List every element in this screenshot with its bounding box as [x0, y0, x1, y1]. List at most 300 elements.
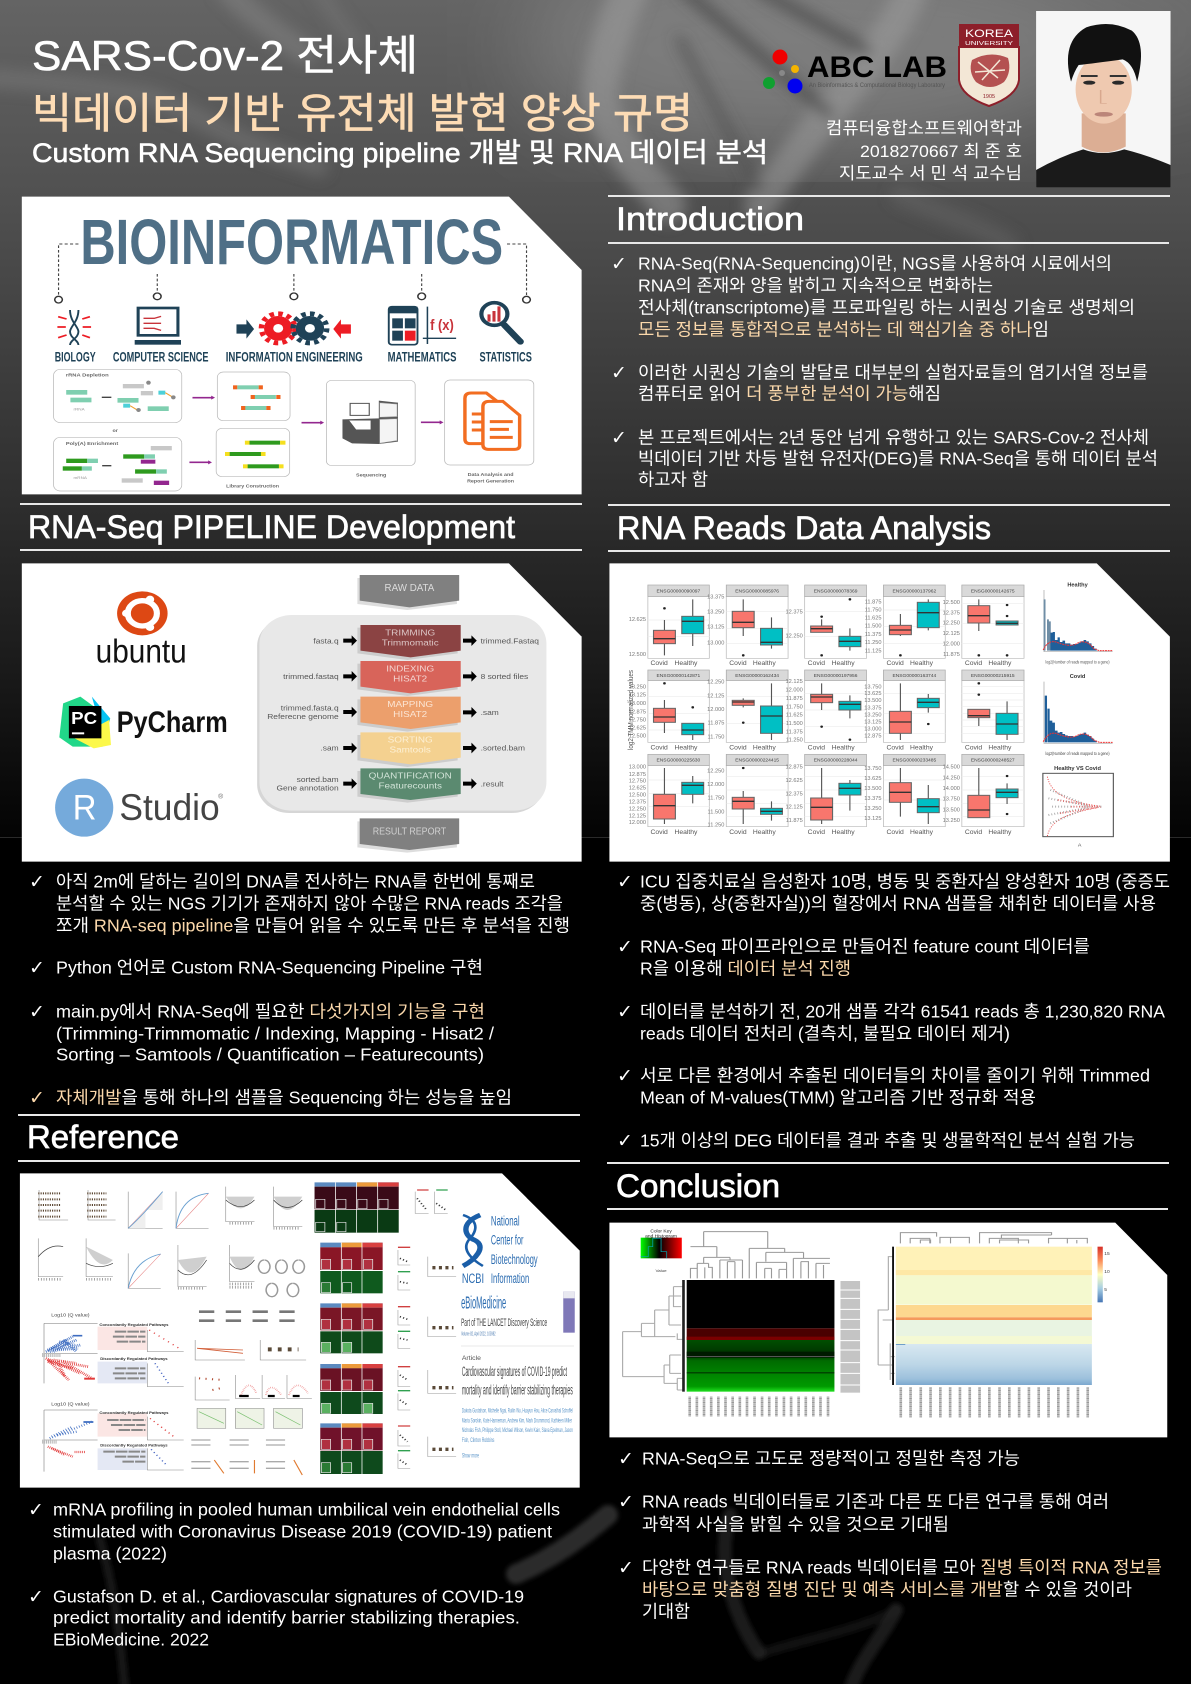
text block: data analysis bullets: 서로 다른 환경에서 추출된 데이터들의 차이를 줄이기 위해 Trimmed — [640, 1066, 1150, 1086]
chart: DEG boxplots: 11.625 — [786, 713, 803, 719]
heading: Introduction: Introduction — [616, 201, 804, 237]
figure: side quantification plots — [398, 1190, 456, 1468]
text block: introduction bullets: 모든 정보를 통합적으로 분석하는 데 핵심기술 중 하나 임 — [638, 320, 1049, 340]
chart: DEG boxplots: 13.000 — [864, 727, 882, 732]
chart: DEG boxplots: ENSG00000228044 — [814, 758, 858, 763]
author information: 지도교수 서 민 석 교수님 — [839, 164, 1022, 183]
chart: DEG boxplots: ENSG00000078369 — [814, 589, 858, 594]
chart: DEG boxplots: 12.000 — [786, 688, 803, 694]
text block: data analysis bullets: RNA-Seq 파이프라인으로 만들어진 feature count 데이터를 — [640, 936, 1090, 956]
text block: introduction bullets: ✓ — [611, 253, 627, 275]
photo: student portrait — [1036, 11, 1171, 188]
panel: RNA reads data analysis charts — [609, 563, 1170, 862]
chart: DEG boxplots: Healthy — [988, 660, 1012, 667]
chart: DEG boxplots: 13.000 — [707, 641, 724, 647]
chart: DEG boxplots: 13.250 — [864, 806, 882, 812]
chart: DEG boxplots: ENSG00000142675 — [971, 589, 1015, 594]
chart: DEG boxplots: 12.750 — [629, 718, 646, 723]
diagram: RNA library preparation workflow: rRNA — [73, 407, 85, 412]
step: indexing: HISAT2 — [393, 674, 427, 683]
figure: volcano plots: Log10 (Q value) — [51, 1402, 90, 1408]
icon: calculator and function: f (x) — [430, 318, 454, 334]
paper header: NCBI and eBioMedicine article: Volume 82, April 2022, 103982 — [461, 1332, 496, 1338]
diagram: RNA library preparation workflow: mRNA — [73, 475, 87, 480]
paper header: NCBI and eBioMedicine article: NCBI — [462, 1271, 484, 1287]
logo: ABC LAB: An Bioinformatics & Computational Biology Laboratory — [809, 83, 945, 89]
chart: DEG boxplots: Healthy — [674, 660, 698, 667]
chart: blue-yellow-red expression heatmap: 15 — [1104, 1251, 1110, 1256]
text block: introduction bullets: 본 프로젝트에서는 2년 동안 넘게 유행하고 있는 SARS-Cov-2 전사체 — [638, 428, 1149, 448]
flow: raw data — [357, 575, 459, 610]
discipline labels: STATISTICS — [479, 349, 532, 365]
chart: DEG boxplots: 11.500 — [865, 624, 882, 630]
text block: reference citations: stimulated with Coronavirus Disease 2019 (COVID-19) patient — [53, 1522, 552, 1542]
file labels: trimmed.fasta.q — [281, 704, 339, 713]
chart: DEG boxplots: ENSG00000225630 — [657, 758, 701, 763]
chart: DEG boxplots: 13.125 — [864, 816, 882, 822]
logo: PyCharm — [59, 697, 228, 748]
chart: DEG boxplots: ENSG00000163744 — [892, 673, 937, 678]
figure: regulated pathway gradients: Concordantly Regulated Pathways — [99, 1322, 169, 1327]
chart: DEG boxplots: 11.375 — [786, 730, 803, 735]
paper header: NCBI and eBioMedicine article: eBioMedicine — [461, 1293, 506, 1312]
chart: DEG boxplots: ENSG00000085976 — [735, 589, 779, 594]
text block: pipeline bullets: ✓ — [29, 871, 45, 893]
chart: DEG boxplots: 11.875 — [708, 721, 724, 727]
text block: data analysis bullets: reads 데이터 전처리 (결측치, 불필요 데이터 제거) — [640, 1024, 1010, 1044]
chart: DEG boxplots: 11.750 — [865, 608, 882, 613]
text block: conclusion bullets — [618, 1448, 1162, 1622]
figure: volcano plots — [42, 1313, 98, 1472]
text block: pipeline bullets: main.py에서 RNA-Seq에 필요한 다섯가지의 기능을 구현 — [56, 1002, 485, 1022]
step: mapping: MAPPING — [387, 700, 433, 709]
chart: DEG boxplots: 12.375 — [786, 792, 803, 797]
text block: pipeline bullets: 아직 2m에 달하는 길이의 DNA를 전사하는 RNA를 한번에 통째로 — [56, 872, 535, 892]
chart: DEG boxplots: 12.125 — [707, 694, 724, 699]
chart: DEG boxplots: Covid — [808, 745, 825, 751]
chart: DEG boxplots: 12.500 — [629, 793, 646, 799]
panel: bioinformatics overview — [22, 197, 582, 494]
text block: data analysis bullets: ✓ — [617, 1130, 633, 1152]
file labels: 8 sorted files — [481, 672, 528, 681]
text block: conclusion bullets: ✓ — [618, 1491, 634, 1513]
step: trimming — [360, 625, 461, 657]
figure: centre plots — [191, 1312, 312, 1475]
chart: DEG boxplots: 11.750 — [708, 735, 724, 741]
author information: 2018270667 최 준 호 — [860, 142, 1022, 161]
text block: pipeline bullets: ✓ — [29, 957, 45, 979]
chart: DEG boxplots: Covid — [886, 660, 904, 667]
logo: PyCharm: PC — [71, 708, 97, 728]
discipline labels: COMPUTER SCIENCE — [113, 349, 209, 365]
step: quantification — [360, 768, 461, 800]
text: Dakota Gustafson, Michelle Ngai, Ruilin Wu, Huayun Hou, Alice Carvalhal Schoffel — [462, 1407, 573, 1415]
text block: pipeline bullets: ✓ — [29, 1087, 45, 1109]
chart: DEG boxplots: ENSG00000197956 — [814, 673, 858, 678]
chart: DEG boxplots: 12.000 — [943, 642, 960, 647]
text block: data analysis bullets: ✓ — [617, 871, 633, 893]
chart: DEG boxplots: 12.625 — [629, 726, 646, 732]
chart: DEG boxplots: Healthy — [753, 829, 777, 836]
chart: DEG boxplots: Healthy — [832, 829, 855, 836]
text block: conclusion bullets: 바탕으로 맞춤형 질병 진단 및 예측 서비스를 개발 할 수 있을 것이라 — [642, 1580, 1132, 1600]
chart: DEG boxplots: 12.375 — [629, 800, 646, 805]
text block: reference citations: predict mortality and identify barrier stabilizing therapies. — [53, 1608, 520, 1628]
chart: DEG boxplots: 12.125 — [629, 814, 646, 819]
chart: DEG boxplots: 13.375 — [707, 595, 724, 600]
discipline labels — [55, 349, 532, 365]
chart: DEG boxplots: 13.500 — [864, 698, 882, 704]
chart: DEG boxplots: Healthy — [753, 745, 777, 751]
text block: conclusion bullets: 과학적 사실을 밝힐 수 있을 것으로 기대됨 — [642, 1514, 949, 1534]
chart: DEG boxplots: 11.875 — [865, 600, 882, 605]
chart: DEG boxplots: 12.250 — [943, 621, 960, 627]
chart: DEG boxplots: Covid — [965, 660, 983, 667]
heading: Conclusion: Conclusion — [616, 1168, 780, 1204]
text: Nicholas Fish, Philippe Stoll, Michael Wilson, Kevin Kain, Slava Epelman, Jason — [462, 1426, 573, 1434]
file labels: .sam — [481, 708, 499, 717]
text: Cardiovascular signatures of COVID-19 predict — [462, 1364, 567, 1380]
chart: DEG boxplots: 12.125 — [786, 679, 803, 685]
chart: Healthy vs Covid MA plot: A — [1078, 843, 1082, 849]
text block: reference citations: EBioMedicine. 2022 — [53, 1630, 209, 1650]
flow: pipeline container — [257, 615, 546, 813]
file labels: .sam — [320, 744, 339, 753]
chart: DEG boxplots: 14.250 — [943, 776, 960, 781]
chart: DEG boxplots: Healthy — [988, 745, 1012, 751]
diagram: RNA library preparation workflow — [54, 369, 534, 491]
diagram: RNA library preparation workflow: Library Construction — [226, 484, 279, 490]
text block: conclusion bullets: 기대함 — [642, 1602, 690, 1622]
step: trimming: TRIMMING — [385, 628, 435, 638]
text block: conclusion bullets: RNA-Seq으로 고도로 정량적이고 정밀한 측정 가능 — [642, 1448, 1020, 1468]
step: indexing: INDEXING — [386, 664, 434, 673]
chart: green-red heatmap with dendrograms: and Histogram — [645, 1234, 677, 1238]
file labels: fasta.q — [313, 637, 339, 645]
chart: DEG boxplots: Covid — [808, 829, 825, 836]
chart: DEG boxplots: 13.750 — [943, 797, 960, 803]
chart: DEG boxplots: 12.750 — [629, 779, 646, 785]
paper header: NCBI and eBioMedicine article: Biotechnology — [491, 1252, 538, 1268]
text block: conclusion bullets: ✓ — [618, 1448, 634, 1470]
text block: pipeline bullets: 쪼개 RNA-seq pipeline을 만들어 읽을 수 있도록 만든 후 분석을 진행 — [56, 916, 570, 936]
chart: DEG boxplots: 13.250 — [864, 713, 882, 718]
text block: introduction bullets: 이러한 시퀀싱 기술의 발달로 대부분의 실험자료들의 염기서열 정보를 — [638, 362, 1148, 382]
file labels: .result — [481, 780, 504, 788]
flow: result report: RESULT REPORT — [373, 826, 447, 837]
chart: DEG boxplots: 11.500 — [708, 810, 724, 815]
chart: DEG boxplots: ENSG00000233485 — [892, 758, 937, 763]
chart: DEG boxplots: 11.625 — [865, 616, 882, 622]
text block: data analysis bullets: 중(병동), 상(중환자실))의 혈장에서 RNA 샘플을 채취한 데이터를 사용 — [640, 894, 1156, 914]
chart: DEG boxplots: ENSG00000248527 — [971, 758, 1015, 763]
chart: DEG boxplots: 13.000 — [629, 701, 646, 707]
chart: DEG boxplots: 14.500 — [943, 765, 960, 771]
chart: DEG boxplots: Healthy — [832, 660, 855, 667]
step: sorting — [360, 732, 461, 764]
text block: introduction bullets: 전사체(transcriptome)를 프로파일링 하는 시퀀싱 기술로 생명체의 — [638, 298, 1135, 318]
chart: DEG boxplots: 13.750 — [864, 766, 882, 772]
chart: DEG boxplots: 13.000 — [629, 765, 646, 771]
text block: reference citations: plasma (2022) — [53, 1544, 167, 1564]
chart: DEG boxplots: 11.125 — [865, 649, 882, 654]
text block: introduction bullets: 하고자 함 — [638, 470, 708, 490]
text block: pipeline bullets: ✓ — [29, 1001, 45, 1023]
chart: DEG boxplots: 12.625 — [629, 617, 646, 623]
text block: reference citations: ✓ — [28, 1499, 44, 1521]
figure: regulated pathway gradients — [98, 1322, 184, 1470]
chart: DEG boxplots: 11.500 — [786, 721, 803, 727]
file labels: Gene annotation — [277, 784, 339, 793]
chart: DEG boxplots: 11.250 — [786, 738, 803, 743]
title block: 빅데이터 기반 유전체 발현 양상 규명 — [32, 90, 693, 137]
chart: DEG boxplots: 13.500 — [943, 808, 960, 813]
text block: introduction bullets: RNA-Seq(RNA-Sequencing)이란, NGS를 사용하여 시료에서의 — [638, 254, 1112, 274]
chart: DEG boxplots: 13.500 — [864, 786, 882, 792]
text block: introduction bullets: RNA의 존재와 양을 밝히고 지속적으로 변화하는 — [638, 276, 993, 296]
flow: raw data: RAW DATA — [385, 583, 435, 594]
panel: reference paper figures — [20, 1173, 580, 1488]
step: indexing — [360, 661, 461, 693]
chart: DEG boxplots: 14.000 — [943, 786, 960, 792]
chart: Healthy histogram: Healthy — [1067, 583, 1088, 588]
chart: DEG boxplots: Covid — [965, 745, 983, 751]
chart: DEG boxplots: 12.125 — [943, 631, 960, 637]
chart: Healthy histogram — [1043, 583, 1113, 664]
chart: DEG boxplots: Covid — [651, 745, 668, 751]
heading: Reference: Reference — [27, 1119, 179, 1155]
author information: 컴퓨터융합소프트웨어학과 — [826, 119, 1022, 138]
text block: pipeline bullets: 분석할 수 있는 NGS 기기가 존재하지 않아 수많은 RNA reads 조각을 — [56, 894, 563, 914]
file labels: trimmed.Fastaq — [481, 637, 539, 645]
logo: Korea University shield: 1905 — [983, 94, 995, 100]
chart: DEG boxplots: Healthy — [753, 660, 777, 667]
chart: DEG boxplots: 12.125 — [786, 805, 803, 811]
text block: introduction bullets: ✓ — [611, 362, 627, 384]
diagram: RNA library preparation workflow: rRNA Depletion — [66, 373, 109, 379]
paper header: NCBI and eBioMedicine article — [461, 1214, 575, 1460]
chart: green-red heatmap with dendrograms — [623, 1229, 860, 1417]
chart: DEG boxplots: 11.375 — [865, 632, 882, 638]
chart: DEG boxplots: 11.250 — [865, 640, 882, 646]
step: mapping — [360, 697, 461, 729]
chart: DEG boxplots: 11.250 — [708, 823, 724, 829]
diagram: RNA library preparation workflow: or — [112, 428, 118, 434]
text block: conclusion bullets: ✓ — [618, 1557, 634, 1579]
paper header: NCBI and eBioMedicine article: Information — [491, 1271, 529, 1287]
panel: pipeline tools and flow — [22, 563, 582, 862]
chart: DEG boxplots: Covid — [808, 660, 825, 667]
step: quantification: QUANTIFICATION — [369, 771, 452, 781]
chart: DEG boxplots: Healthy — [674, 829, 698, 836]
chart: green-red heatmap with dendrograms: Value — [655, 1268, 667, 1273]
chart: DEG boxplots: 12.250 — [786, 634, 803, 640]
logo: ubuntu — [96, 591, 187, 670]
chart: DEG boxplots: 12.000 — [629, 820, 646, 826]
chart: DEG boxplots: 12.000 — [707, 782, 724, 788]
chart: DEG boxplots: 12.875 — [629, 710, 646, 715]
chart: DEG boxplots: 12.625 — [786, 778, 803, 784]
text block: pipeline bullets — [29, 871, 570, 1109]
text block: data analysis bullets: ✓ — [617, 936, 633, 958]
logo: ABC LAB — [763, 50, 947, 94]
text block: data analysis bullets — [617, 871, 1170, 1152]
text block: introduction bullets: ✓ — [611, 427, 627, 449]
text block: introduction bullets: 컴퓨터로 읽어 더 풍부한 분석이 가능해짐 — [638, 384, 941, 404]
logo: RStudio: ® — [218, 793, 223, 800]
file labels: trimmed.fastaq — [283, 672, 339, 681]
chart: Covid histogram: Covid — [1070, 674, 1085, 680]
chart: Covid histogram: log2(Number of reads mapped to a gene) — [1046, 751, 1110, 756]
text: mortality and identify barrier stabilizing therapies — [462, 1383, 573, 1398]
chart: DEG boxplots: 13.750 — [864, 685, 882, 691]
paper header: NCBI and eBioMedicine article: Article — [462, 1355, 481, 1362]
discipline labels: INFORMATION ENGINEERING — [226, 349, 363, 365]
chart: DEG boxplots: ENSG00000162434 — [735, 673, 779, 678]
text block: conclusion bullets: RNA reads 빅데이터들로 기존과 다른 또 다른 연구를 통해 여러 — [642, 1492, 1109, 1512]
chart: DEG boxplots: 12.500 — [943, 600, 960, 606]
discipline labels: MATHEMATICS — [388, 349, 457, 365]
logo: Korea University shield — [959, 24, 1019, 106]
chart: DEG boxplots: Healthy — [674, 745, 698, 751]
chart: DEG boxplots: 12.500 — [629, 652, 646, 658]
chart: DEG boxplots: 13.375 — [864, 796, 882, 802]
title block: Custom RNA Sequencing pipeline 개발 및 RNA 데이터 분석 — [32, 138, 768, 168]
figure: regulated pathway gradients: Discordantly Regulated Pathways — [100, 1443, 169, 1448]
chart: DEG boxplots: Healthy — [910, 745, 934, 751]
logo: RStudio — [55, 779, 223, 837]
chart: DEG boxplots: 12.875 — [629, 772, 646, 778]
chart: DEG boxplots: 12.250 — [629, 807, 646, 812]
chart: DEG boxplots: 12.875 — [786, 765, 803, 771]
step: sorting: SORTING — [388, 735, 433, 745]
logo: Korea University shield: UNIVERSITY — [965, 41, 1013, 47]
chart: DEG boxplots: Covid — [729, 660, 747, 667]
text block: reference citations — [28, 1499, 560, 1650]
chart: DEG boxplots: Covid — [651, 829, 668, 836]
figure: regulated pathway gradients: Discordantly Regulated Pathways — [100, 1356, 169, 1361]
figure: immunofluorescence image grids — [315, 1182, 399, 1474]
text block: data analysis bullets: R을 이용해 데이터 분석 진행 — [640, 958, 851, 978]
chart: DEG boxplots: ENSG00000215915 — [971, 673, 1015, 678]
chart: DEG boxplots: 13.250 — [707, 610, 724, 615]
icon: DNA — [57, 310, 91, 345]
chart: DEG boxplots: 11.875 — [786, 818, 803, 824]
chart: DEG boxplots: 13.250 — [629, 685, 646, 691]
file labels: sorted.bam — [297, 775, 339, 784]
chart: DEG boxplots: 11.875 — [943, 652, 960, 658]
text: Maria Sorokin, Kate Hanneman, Andrew Kim, Mark Drummond, Kathleen Miller — [462, 1417, 572, 1424]
chart: DEG boxplots: ENSG00000137962 — [892, 589, 937, 594]
step: sorting: Samtools — [389, 745, 431, 755]
text block: data analysis bullets: 데이터를 분석하기 전, 20개 샘플 각각 61541 reads 총 1,230,820 RNA — [640, 1002, 1165, 1022]
text block: pipeline bullets: (Trimming-Trimmomatic / Indexing, Mapping - Hisat2 / — [56, 1024, 494, 1044]
heading: BIOINFORMATICS: BIOINFORMATICS — [80, 206, 503, 278]
logo: ubuntu: ubuntu — [96, 633, 187, 670]
text block: pipeline bullets: Sorting – Samtools / Quantification – Featurecounts) — [56, 1044, 484, 1064]
chart: Healthy vs Covid MA plot: Healthy VS Covid — [1054, 766, 1101, 772]
panel: reference paper figures: Part of THE LANCET Discovery Science — [461, 1316, 547, 1329]
step: mapping: HISAT2 — [393, 710, 427, 719]
panel: conclusion heatmaps — [609, 1223, 1167, 1437]
logo: RStudio: R — [73, 788, 96, 827]
chart: DEG boxplots: 13.625 — [864, 776, 882, 782]
chart: blue-yellow-red expression heatmap: 10 — [1104, 1269, 1110, 1274]
diagram: RNA library preparation workflow: Sequencing — [356, 473, 386, 479]
chart: DEG boxplots: 12.875 — [864, 734, 882, 739]
chart: DEG boxplots: 12.375 — [943, 611, 960, 616]
chart: DEG boxplots: 13.125 — [707, 625, 724, 631]
text block: introduction bullets: 빅데이터 기반 차등 발현 유전자(DEG)를 RNA-Seq을 통해 데이터 분석 — [638, 448, 1158, 468]
heading: RNA-Seq PIPELINE Development: RNA-Seq PIPELINE Development — [28, 509, 515, 545]
text block: introduction bullets — [611, 253, 1158, 490]
text block: pipeline bullets: Python 언어로 Custom RNA-Sequencing Pipeline 구현 — [56, 958, 483, 978]
paper header: NCBI and eBioMedicine article: National — [491, 1214, 520, 1229]
diagram: RNA library preparation workflow: Poly(A) Enrichment — [66, 441, 119, 447]
chart: DEG boxplots: Healthy — [910, 829, 934, 836]
author information — [826, 119, 1022, 183]
logo: RStudio: Studio — [119, 787, 220, 828]
text block: data analysis bullets: ✓ — [617, 1001, 633, 1023]
text block: data analysis bullets: 15개 이상의 DEG 데이터를 결과 추출 및 생물학적인 분석 실험 가능 — [640, 1130, 1135, 1150]
figure: survival and ROC small plots — [38, 1187, 304, 1297]
heading: RNA Reads Data Analysis: RNA Reads Data Analysis — [617, 510, 991, 546]
text block: data analysis bullets: ICU 집중치료실 음성환자 10명, 병동 및 중환자실 양성환자 10명 (중증도 — [640, 872, 1170, 892]
chart: DEG boxplots: Covid — [886, 829, 904, 836]
logo: Korea University shield: KOREA — [965, 28, 1014, 40]
chart: Healthy histogram: log2(Number of reads mapped to a gene) — [1046, 660, 1110, 664]
chart: DEG boxplots: Covid — [651, 660, 668, 667]
text block: data analysis bullets: ✓ — [617, 1065, 633, 1087]
chart: DEG boxplots: ENSG00000224415 — [735, 758, 779, 763]
chart: DEG boxplots: 13.125 — [864, 720, 882, 725]
chart: DEG boxplots: 12.000 — [707, 707, 724, 713]
diagram: RNA library preparation workflow: Data Analysis and — [468, 472, 514, 478]
file labels: Referecne genome — [267, 712, 339, 721]
title block — [32, 32, 768, 168]
chart: DEG boxplots: 12.375 — [786, 610, 803, 615]
logo: PyCharm: PyCharm — [117, 705, 228, 739]
text block: reference citations: mRNA profiling in pooled human umbilical vein endothelial cells — [53, 1500, 560, 1520]
chart: DEG boxplots: log2 TMM normalized values — [627, 670, 635, 750]
chart: DEG boxplots: Covid — [729, 745, 747, 751]
chart: Covid histogram — [1043, 674, 1113, 756]
file labels — [267, 637, 539, 793]
chart: DEG boxplots: 13.125 — [629, 693, 646, 699]
chart: DEG boxplots: 11.750 — [708, 796, 724, 801]
figure: regulated pathway gradients: Concordantly Regulated Pathways — [99, 1410, 169, 1415]
text block: reference citations: Gustafson D. et al., Cardiovascular signatures of COVID-19 — [53, 1586, 524, 1606]
chart: green-red heatmap with dendrograms: Color Key — [650, 1229, 673, 1234]
chart: DEG boxplots: Covid — [886, 745, 904, 751]
chart: Healthy vs Covid MA plot — [1043, 766, 1113, 849]
step: trimming: Trimmomatic — [382, 638, 439, 648]
chart: blue-yellow-red expression heatmap — [878, 1233, 1110, 1417]
chart: DEG boxplots: Covid — [965, 829, 983, 836]
chart: DEG boxplots: Covid — [729, 829, 747, 836]
arrows: inputs and outputs — [343, 635, 477, 789]
chart: DEG boxplots: 13.625 — [864, 691, 882, 697]
discipline labels: BIOLOGY — [55, 349, 96, 365]
diagram: RNA library preparation workflow: Report Generation — [467, 479, 514, 485]
chart: DEG boxplots: 12.500 — [629, 734, 646, 740]
title block: SARS-Cov-2 전사체 — [32, 32, 418, 79]
chart: DEG boxplots: Healthy — [988, 829, 1012, 836]
chart: DEG boxplots: 12.250 — [707, 680, 724, 686]
text block: conclusion bullets: 다양한 연구들로 RNA reads 빅데이터를 모아 질병 특이적 RNA 정보를 — [642, 1558, 1162, 1578]
flow: result report — [357, 818, 459, 853]
chart: DEG boxplots: Healthy — [910, 660, 934, 667]
